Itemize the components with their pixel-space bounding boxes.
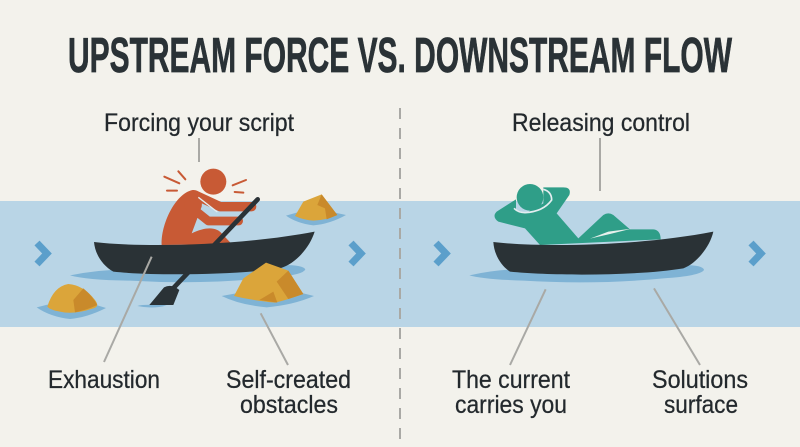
label: the current carries you: The current (452, 366, 570, 394)
relaxed figure (495, 184, 661, 245)
icon: left flow chevrons (37, 243, 361, 264)
illustration: relaxed figure in canoe (469, 184, 713, 365)
panel: downstream flow (436, 109, 761, 419)
canoe (94, 232, 315, 274)
icon: bottom left rock (37, 284, 106, 319)
label: the current carries you: carries you (455, 391, 567, 419)
paddle (137, 199, 258, 308)
label: self-created obstacles (226, 366, 351, 419)
leader line: forcing your script (198, 138, 200, 162)
canoe shadow (469, 265, 704, 282)
leader line: the current carries you (510, 289, 546, 365)
heading: forcing your script: Forcing your script (104, 109, 294, 137)
water band (0, 201, 800, 327)
icon: strain marks (164, 171, 246, 193)
leader line: releasing control (599, 138, 601, 191)
panel: upstream force (37, 109, 361, 419)
paddler head (200, 169, 226, 195)
label: the current carries you (452, 366, 570, 419)
leader line: exhaustion (104, 257, 152, 362)
icon: front rock (222, 263, 314, 307)
leader line: self-created obstacles (261, 313, 288, 365)
icon: top right rock (286, 194, 346, 225)
divider (399, 108, 401, 447)
canoe (493, 232, 713, 275)
canoe shadow (70, 265, 305, 282)
illustration: paddler in canoe with rocks (37, 169, 346, 365)
label: exhaustion: Exhaustion (48, 366, 160, 394)
label: self-created obstacles: Self-created (226, 366, 351, 394)
paddler body (162, 190, 252, 245)
leader line: solutions surface (654, 288, 700, 365)
label: solutions surface (652, 366, 748, 419)
label: solutions surface: Solutions (652, 366, 748, 394)
icon: right flow chevrons (436, 243, 761, 264)
heading: releasing control: Releasing control (512, 109, 690, 137)
label: solutions surface: surface (664, 391, 738, 419)
label: self-created obstacles: obstacles (240, 391, 338, 419)
